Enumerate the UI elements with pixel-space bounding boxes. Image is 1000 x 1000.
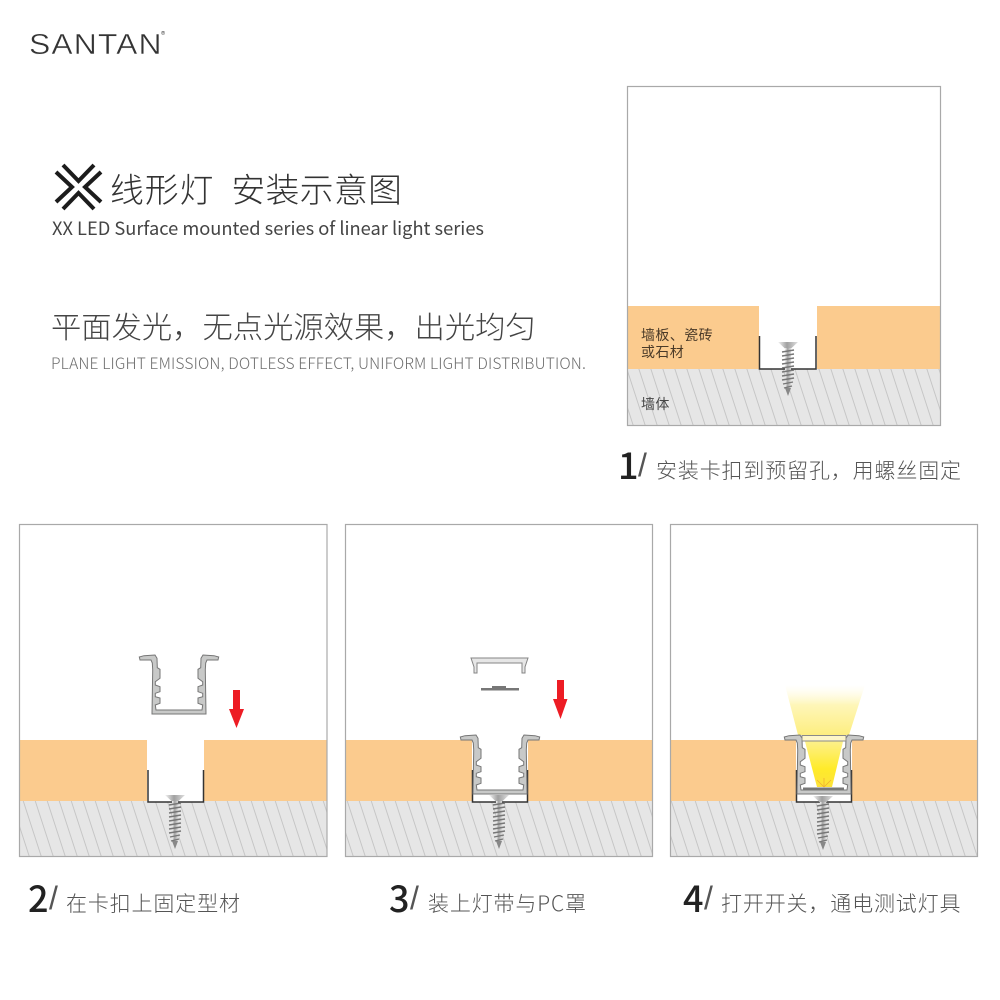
panel: step 2 bbox=[20, 524, 327, 856]
wall board layer bbox=[671, 740, 977, 801]
caption: step 3: 装上灯带与PC罩 bbox=[428, 888, 587, 918]
arrow: down bbox=[553, 680, 568, 719]
caption: step 2: / bbox=[49, 880, 58, 916]
screw bbox=[489, 795, 509, 849]
panel: step 1 bbox=[628, 86, 940, 426]
aluminium profile bbox=[784, 735, 864, 794]
clip bbox=[760, 336, 816, 369]
wall board layer bbox=[628, 306, 940, 369]
wall hatch layer bbox=[346, 801, 652, 856]
logo: SANTAN: SANTAN bbox=[29, 29, 163, 61]
LED glow bbox=[817, 778, 831, 787]
caption: step 4: 打开开关，通电测试灯具 bbox=[721, 888, 961, 918]
aluminium profile bbox=[460, 735, 540, 794]
PC cover bbox=[802, 736, 846, 741]
subtitle english: XX LED Surface mounted series of linear light series bbox=[52, 215, 484, 241]
wall hatch layer bbox=[628, 369, 940, 425]
light beam inside bbox=[805, 742, 843, 787]
caption: step 4: / bbox=[704, 880, 713, 916]
LED strip bbox=[803, 788, 844, 790]
panel: step 3 bbox=[346, 524, 652, 856]
panel 4 border bbox=[670, 524, 978, 856]
label: stone: 或石材 bbox=[641, 342, 684, 362]
caption: step 4 bbox=[683, 871, 961, 923]
icon: X logo mark bbox=[54, 164, 102, 210]
caption: step 1: 1 bbox=[618, 438, 639, 490]
screw bbox=[778, 342, 798, 396]
panel 2 border bbox=[20, 524, 327, 856]
light beam above bbox=[785, 685, 865, 735]
panel 1 border bbox=[628, 86, 940, 426]
feature heading: 平面发光，无点光源效果，出光均匀 bbox=[51, 303, 536, 347]
wall board layer bbox=[346, 740, 652, 801]
panel 3 border bbox=[346, 524, 652, 856]
caption: step 3 bbox=[389, 871, 587, 923]
caption: step 3: / bbox=[410, 880, 419, 916]
clip bbox=[148, 770, 204, 802]
logo: SANTAN: ® bbox=[161, 28, 165, 41]
LED strip bbox=[481, 686, 519, 690]
caption: step 1: 安装卡扣到预留孔，用螺丝固定 bbox=[656, 455, 962, 485]
feature subtitle english: PLANE LIGHT EMISSION, DOTLESS EFFECT, UNIFORM LIGHT DISTRIBUTION. bbox=[51, 352, 586, 374]
caption: step 2 bbox=[28, 871, 241, 923]
caption: step 3: 3 bbox=[389, 871, 410, 923]
caption: step 2: 2 bbox=[28, 871, 49, 923]
wall hatch layer bbox=[671, 801, 977, 856]
clip bbox=[472, 770, 528, 802]
panel: step 4 bbox=[670, 524, 978, 856]
caption: step 1: / bbox=[638, 447, 647, 483]
caption: step 4: 4 bbox=[683, 871, 704, 923]
arrow: down bbox=[229, 690, 244, 728]
screw bbox=[813, 796, 833, 850]
wall hatch layer bbox=[20, 801, 327, 856]
clip bbox=[796, 770, 852, 802]
PC cover bbox=[471, 658, 528, 673]
wall board layer bbox=[20, 740, 327, 801]
screw bbox=[165, 795, 185, 849]
caption: step 2: 在卡扣上固定型材 bbox=[66, 888, 241, 918]
aluminium profile bbox=[139, 655, 219, 714]
caption: step 1 bbox=[618, 438, 962, 490]
label: wall: 墙体 bbox=[641, 394, 670, 414]
title: 线形灯 安装示意图 bbox=[110, 163, 402, 212]
label: wall board: 墙板、瓷砖 bbox=[641, 325, 713, 345]
